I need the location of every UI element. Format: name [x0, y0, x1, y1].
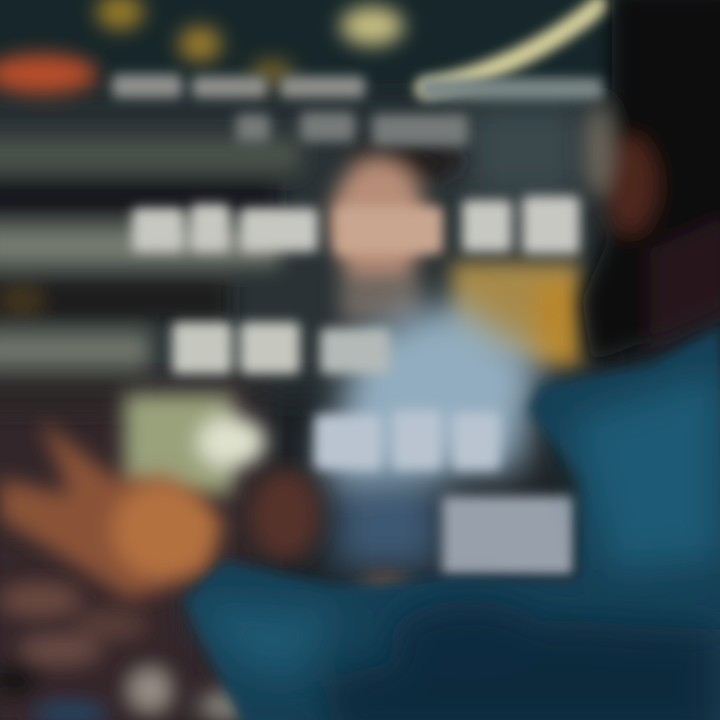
person: light shirt [320, 300, 540, 570]
curved ceiling light [425, 5, 600, 88]
person: face and hair [330, 144, 463, 322]
foreground hand [0, 420, 409, 606]
shelves at left [0, 138, 300, 412]
foreground blue sleeve and shoulder [185, 325, 720, 720]
top bokeh lights [0, 0, 404, 94]
pale panel lower right [442, 496, 574, 576]
bottom left mottled crowd [0, 540, 251, 720]
yellow backdrop [452, 262, 581, 365]
line 1 [112, 74, 605, 100]
green paper and glow [124, 394, 266, 494]
line 2 [236, 112, 468, 146]
line 4 [172, 322, 390, 374]
blurred headline text rows [112, 74, 605, 470]
line 5 [314, 410, 500, 470]
foreground head with beard and ear [582, 0, 720, 362]
line 3 [132, 196, 580, 254]
